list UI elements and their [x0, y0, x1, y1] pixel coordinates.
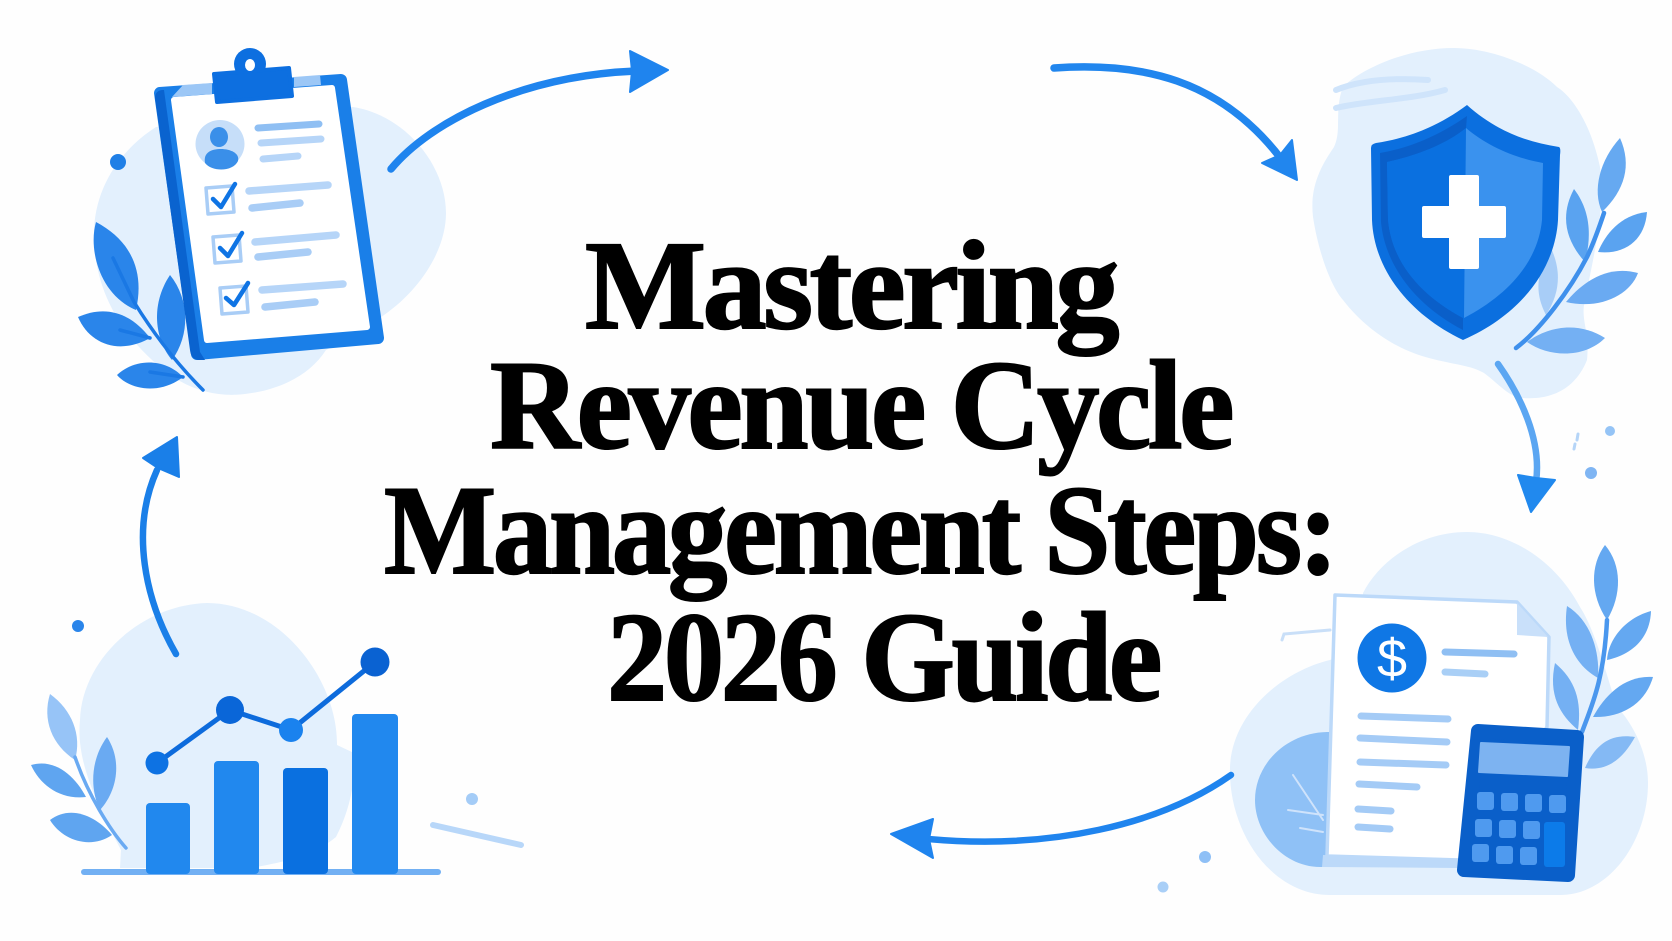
clipboard board	[155, 75, 378, 360]
checklist item 1	[206, 184, 328, 214]
checklist item 3	[220, 283, 343, 314]
baseline	[84, 869, 438, 875]
title: Management Steps:	[384, 461, 1335, 601]
title: 2026 Guide	[607, 588, 1160, 728]
shield	[1371, 105, 1560, 340]
patient lines	[258, 124, 321, 159]
calculator keys	[1472, 792, 1566, 867]
panel: analytics chart	[31, 603, 521, 874]
semi circle leaf backdrop	[1255, 732, 1335, 867]
clip	[214, 48, 292, 102]
motion strokes	[1336, 79, 1445, 108]
dollar badge	[1358, 624, 1426, 692]
arrow: shield to invoice	[1498, 364, 1555, 512]
dot	[72, 620, 84, 632]
title	[384, 216, 1335, 728]
trend line	[146, 648, 390, 774]
patient avatar	[196, 120, 244, 170]
plant branch	[1553, 545, 1653, 769]
title: Revenue Cycle	[490, 336, 1232, 476]
laurel branch	[1516, 138, 1647, 354]
checklist item 2	[213, 233, 336, 263]
calculator	[1464, 731, 1577, 875]
accent dots near arrow	[1574, 426, 1615, 479]
panel: insurance shield	[1312, 48, 1647, 398]
invoice document	[1282, 595, 1549, 868]
panel: invoice and calculator	[1230, 532, 1653, 895]
invoice lines	[1358, 652, 1514, 829]
dot	[110, 154, 126, 170]
panel: patient intake clipboard	[78, 48, 446, 395]
accent dot and dash	[433, 793, 521, 845]
medical cross	[1422, 175, 1506, 269]
leaves	[31, 694, 126, 848]
arrow: invoice to chart	[891, 775, 1231, 858]
title: Mastering	[585, 216, 1119, 356]
background blob	[94, 107, 446, 395]
calculator screen	[1479, 743, 1569, 776]
background blob	[1312, 48, 1601, 398]
leaves	[78, 222, 203, 390]
bars	[146, 714, 398, 874]
arrow: to shield	[1054, 67, 1297, 180]
dollar badge: $	[1377, 629, 1407, 689]
background blob	[79, 603, 354, 868]
arrow: clipboard to shield top	[391, 51, 668, 169]
accent dots near invoice	[1158, 851, 1211, 892]
arrow: chart to clipboard	[143, 437, 179, 654]
background blob	[1230, 532, 1648, 895]
